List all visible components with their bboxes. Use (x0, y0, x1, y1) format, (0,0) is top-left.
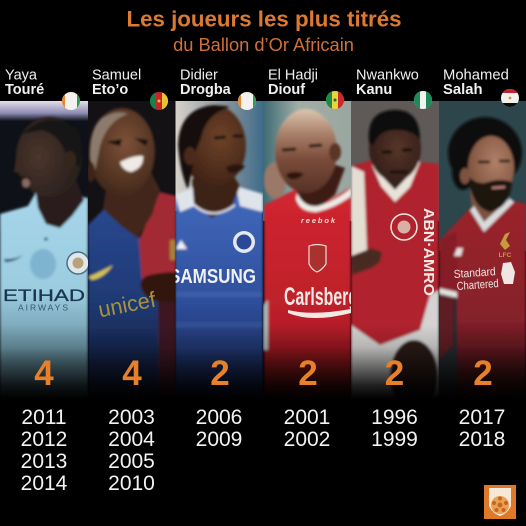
player name: Samuel Eto'o: Samuel (92, 68, 141, 84)
years: Touré: 2012 (21, 428, 67, 451)
jersey sponsor: Etihad Airways (4, 289, 84, 310)
player name: Samuel Eto'o: Eto’o (92, 82, 128, 98)
icon: Senegal flag (326, 91, 344, 109)
jersey sponsor: Unicef: unicef (96, 287, 159, 322)
player name: Mohamed Salah (443, 68, 509, 98)
years: Touré: 2013 (21, 450, 67, 473)
years: Salah: 2018 (459, 428, 505, 451)
years: Kanu (371, 406, 418, 451)
years: Kanu: 1996 (371, 406, 418, 429)
panel: Nwankwo Kanu photo (351, 101, 439, 412)
jersey sponsor: Standard Chartered: Chartered (456, 278, 499, 293)
count: Touré 4: 4 (34, 354, 54, 393)
player name: Yaya Touré (5, 68, 44, 98)
years: Drogba: 2009 (196, 428, 242, 451)
icon: Liverpool liver bird crest (499, 232, 511, 257)
jersey sponsor: Standard Chartered: Standard (453, 266, 496, 281)
title: Les joueurs les plus titrés (126, 6, 402, 32)
jersey sponsor: Etihad Airways: AIRWAYS (18, 302, 68, 312)
years: Eto'o: 2005 (108, 450, 155, 473)
panel: Yaya Touré photo (0, 101, 89, 400)
icon: Egypt flag (501, 89, 519, 107)
panel: Didier Drogba photo (169, 101, 263, 400)
jersey sponsor: Carlsberg (284, 287, 351, 318)
icon: Manchester City crest (67, 252, 89, 274)
years: Touré: 2014 (21, 472, 68, 495)
player name: Yaya Touré: Yaya (5, 68, 38, 84)
years: Touré (21, 406, 68, 495)
icon: Ivory Coast flag (238, 92, 256, 110)
years: Eto'o: 2010 (108, 472, 155, 495)
jersey sponsor: Etihad Airways: ETIHAD (3, 286, 85, 305)
years: Diouf: 2001 (284, 406, 330, 429)
bottom fade to black over photos (0, 325, 526, 401)
years: Eto'o: 2004 (108, 428, 155, 451)
player name: Didier Drogba: Didier (180, 68, 218, 84)
jersey sponsor: ABN AMRO: ABN·AMRO (420, 208, 437, 296)
player name: El Hadji Diouf (268, 68, 318, 98)
count: Drogba 2: 2 (210, 354, 230, 393)
jersey text: Reebok: reebok (301, 216, 336, 225)
count: Eto'o 4: 4 (122, 354, 142, 393)
jersey sponsor: Standard Chartered (454, 262, 515, 290)
years: Salah (459, 406, 505, 451)
player name: Samuel Eto'o (92, 68, 141, 98)
panel: Samuel Eto'o photo (87, 101, 176, 400)
player name: El Hadji Diouf: El Hadji (268, 68, 318, 84)
years: Touré: 2011 (21, 406, 67, 429)
years: Eto'o: 2003 (108, 406, 155, 429)
jersey sponsor: Samsung: SAMSUNG (169, 266, 256, 288)
count: Diouf 2: 2 (298, 354, 318, 393)
icon: Nigeria flag (414, 91, 432, 109)
player name: Didier Drogba (180, 68, 232, 98)
player name: Nwankwo Kanu (356, 68, 419, 98)
player name: Nwankwo Kanu: Nwankwo (356, 68, 419, 84)
panel: Mohamed Salah photo (439, 101, 526, 400)
subtitle: du Ballon d’Or Africain (173, 34, 354, 55)
player name: Mohamed Salah: Mohamed (443, 68, 509, 84)
panel: El Hadji Diouf photo (263, 101, 358, 400)
years: Drogba (196, 406, 242, 451)
icon: Ivory Coast flag (62, 92, 80, 110)
years: Salah: 2017 (459, 406, 505, 429)
player name: Didier Drogba: Drogba (180, 82, 232, 98)
years: Eto'o (108, 406, 155, 495)
player name: Nwankwo Kanu: Kanu (356, 82, 392, 98)
icon: Liverpool crest (309, 244, 326, 272)
icon: Chelsea crest (233, 231, 255, 253)
icon: Ajax crest (391, 214, 417, 240)
player name: Yaya Touré: Touré (5, 82, 44, 98)
count: Kanu 2: 2 (385, 354, 404, 393)
years: Kanu: 1999 (371, 428, 418, 451)
years: Diouf: 2002 (284, 428, 330, 451)
years: Drogba: 2006 (196, 406, 242, 429)
years: Diouf (284, 406, 330, 451)
jersey sponsor: Carlsberg: Carlsberg (284, 283, 358, 311)
player name: Mohamed Salah: Salah (443, 82, 482, 98)
icon: orange football logo (484, 485, 516, 519)
count: Salah 2: 2 (473, 354, 493, 393)
player name: El Hadji Diouf: Diouf (268, 82, 305, 98)
icon: Cameroon flag (150, 92, 168, 110)
icon: Liverpool liver bird crest: LFC (499, 252, 512, 259)
